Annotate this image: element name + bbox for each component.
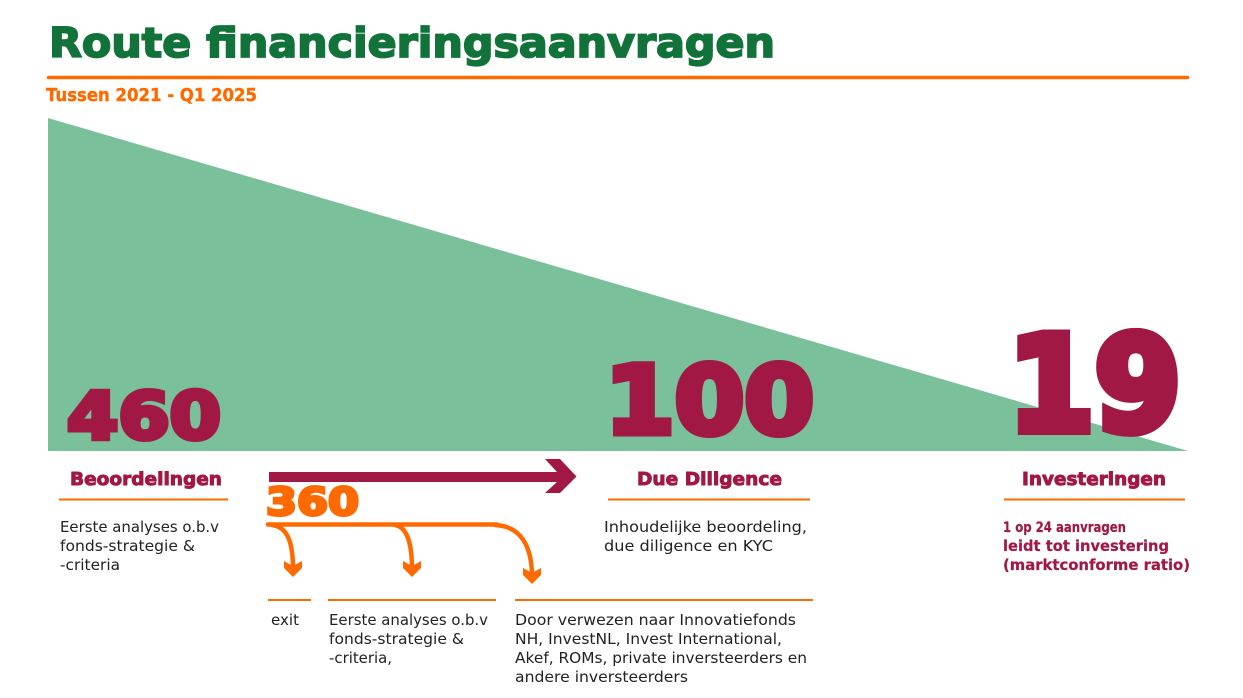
number: 19: 19 bbox=[1008, 308, 1181, 461]
text: doorverwijzen description: Akef, ROMs, private inversteerders en bbox=[515, 649, 807, 667]
heading: beoordelingen: Beoordelingen bbox=[70, 469, 222, 490]
text: beoordelingen description: Eerste analyses o.b.v bbox=[60, 518, 219, 536]
panel: due diligence bbox=[604, 469, 810, 555]
number: 100: 100 bbox=[605, 347, 814, 456]
arrow: exit bbox=[268, 524, 497, 577]
panel: beoordelingen bbox=[59, 469, 228, 574]
number: 360: 360 bbox=[266, 480, 359, 524]
title: Route financieringsaanvragen bbox=[49, 19, 775, 67]
text: investeringen ratio: leidt tot investering bbox=[1003, 537, 1169, 555]
text: eerste analyses description: fonds-strategie & bbox=[329, 630, 464, 648]
number: 460: 460 bbox=[67, 380, 221, 454]
panel: doorverwijzen bbox=[515, 600, 813, 686]
arrow: doorverwijzen bbox=[495, 525, 541, 584]
panel: eerste analyses bbox=[328, 600, 496, 667]
text: exit: exit bbox=[271, 611, 299, 629]
text: investeringen ratio: (marktconforme ratio) bbox=[1003, 556, 1190, 574]
text: doorverwijzen description: NH, InvestNL, Invest International, bbox=[515, 630, 782, 648]
text: due diligence description: Inhoudelijke beoordeling, bbox=[604, 518, 807, 536]
heading: due diligence: Due Diligence bbox=[637, 469, 782, 490]
arrow: eerste analyses bbox=[395, 525, 421, 577]
text: doorverwijzen description: Door verwezen naar Innovatiefonds bbox=[515, 611, 796, 629]
text: due diligence description: due diligence en KYC bbox=[604, 537, 773, 555]
text: eerste analyses description: -criteria, bbox=[329, 649, 392, 667]
text: doorverwijzen description: andere inversteerders bbox=[515, 668, 688, 686]
panel: investeringen bbox=[1003, 469, 1190, 574]
text: investeringen ratio: 1 op 24 aanvragen bbox=[1003, 520, 1126, 536]
text: eerste analyses description: Eerste analyses o.b.v bbox=[329, 611, 488, 629]
panel: exit bbox=[268, 600, 311, 629]
text: beoordelingen description: fonds-strategie & bbox=[60, 537, 195, 555]
subtitle: Tussen 2021 - Q1 2025 bbox=[46, 85, 257, 106]
heading: investeringen: Investeringen bbox=[1022, 469, 1166, 490]
arrow: to due diligence bbox=[269, 459, 576, 493]
title rule bbox=[48, 76, 1188, 79]
text: beoordelingen description: -criteria bbox=[60, 556, 120, 574]
funnel triangle bbox=[48, 118, 1188, 451]
branching arrows bbox=[268, 524, 541, 584]
